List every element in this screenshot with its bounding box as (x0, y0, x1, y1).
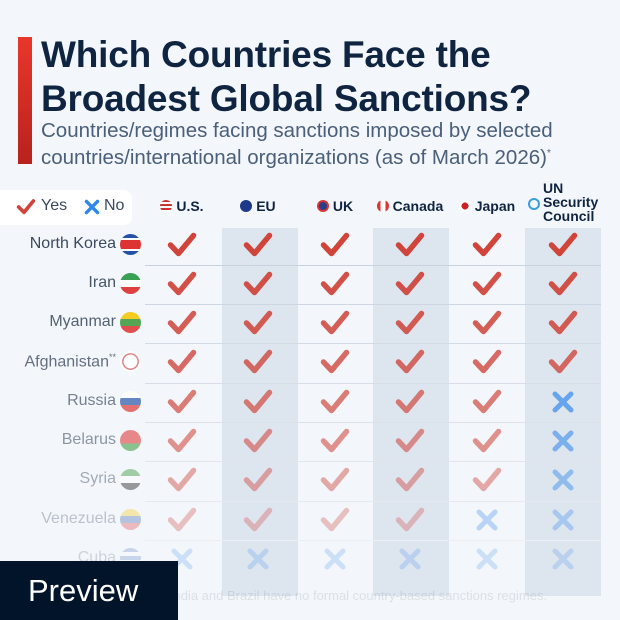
column headers: Council (543, 208, 594, 224)
footnote: * China, India and Brazil have no formal country-based sanctions regimes. (120, 588, 547, 603)
shaded columns (222, 228, 298, 596)
column headers: Canada (393, 198, 443, 214)
row: Cuba (78, 548, 574, 570)
preview badge: Preview (28, 573, 138, 608)
row: Iran (88, 272, 578, 296)
accent bar (18, 37, 32, 164)
row: Syria (80, 468, 574, 492)
row: Venezuela (41, 508, 574, 532)
row: Iran: Iran (88, 274, 116, 291)
row: Myanmar: Myanmar (49, 313, 116, 330)
row: North Korea (30, 232, 578, 256)
title (41, 34, 531, 119)
subtitle (41, 119, 553, 169)
column headers: U.S. (176, 198, 204, 214)
column headers: Japan (475, 198, 515, 214)
row: Belarus: Belarus (62, 431, 116, 448)
row: Afghanistan: Afghanistan** (24, 352, 116, 370)
subtitle: Countries/regimes facing sanctions imposed by selected (41, 119, 553, 142)
legend (0, 190, 132, 225)
row: Afghanistan (24, 350, 578, 374)
column headers: EU (256, 198, 276, 214)
column headers: UK (333, 198, 353, 214)
column headers: Security (543, 194, 598, 210)
column headers (160, 180, 598, 224)
row: Venezuela: Venezuela (41, 510, 116, 527)
row: Russia: Russia (67, 392, 116, 409)
title: Which Countries Face the (41, 34, 491, 75)
row: Myanmar (49, 310, 578, 334)
legend: Yes (41, 197, 67, 214)
row: Russia (67, 390, 574, 414)
legend: No (104, 197, 124, 214)
dividers (145, 265, 601, 266)
row: North Korea: North Korea (30, 235, 116, 252)
text: UN (543, 180, 563, 196)
subtitle: countries/international organizations (as of March 2026)* (41, 146, 551, 169)
preview badge (0, 561, 178, 620)
row: Cuba: Cuba (78, 549, 116, 566)
title: Broadest Global Sanctions? (41, 78, 531, 119)
row: Syria: Syria (80, 470, 116, 487)
row: Belarus (62, 428, 574, 452)
